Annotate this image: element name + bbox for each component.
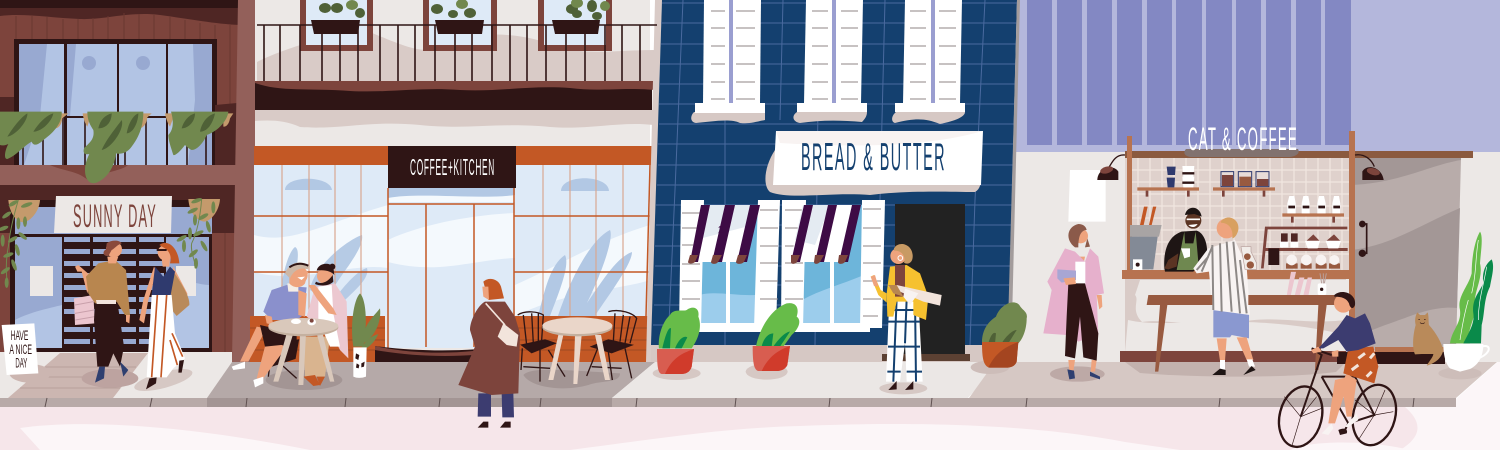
A-frame sign: A NICE xyxy=(9,341,32,357)
hanging pot left with vine xyxy=(0,199,40,288)
seated man with hat xyxy=(232,262,342,390)
woman in pink coat xyxy=(1043,224,1105,382)
milk bottles xyxy=(1287,196,1340,213)
sign: Cat and Coffee xyxy=(1184,121,1299,157)
street xyxy=(0,360,1500,450)
counter items xyxy=(1288,273,1326,295)
woman in striped trousers xyxy=(132,243,194,395)
hanging pot right with vine xyxy=(176,197,220,269)
shelves and cups xyxy=(1130,155,1493,450)
cookie jar xyxy=(1241,247,1257,269)
sign: Coffee + Kitchen xyxy=(388,146,516,188)
building: Bread and Butter xyxy=(651,0,1017,363)
olive potted plant xyxy=(971,302,1027,374)
cafe table two xyxy=(542,317,612,384)
building: Cat and Coffee xyxy=(1007,0,1500,362)
street scene illustration: CAT & COFFEE xyxy=(1188,121,1298,157)
door handle xyxy=(1359,221,1367,257)
cafe interior and right figures, drawn at 3x xyxy=(1130,155,1493,450)
potted plant with spotted pot xyxy=(352,293,380,378)
jars xyxy=(1221,172,1269,187)
chair right xyxy=(587,311,637,380)
awning 2 xyxy=(83,112,152,183)
A-frame sign: HAVE xyxy=(11,327,28,343)
sign: Sunny Day xyxy=(54,196,172,234)
red potted plant xyxy=(653,308,701,380)
woman in yellow jacket xyxy=(871,244,942,394)
awning 3 xyxy=(165,112,233,155)
building: Sunny Day xyxy=(0,0,257,362)
awning 1 xyxy=(0,112,68,159)
door xyxy=(882,204,970,361)
cafe table one xyxy=(268,318,338,385)
wall poster xyxy=(1068,170,1106,222)
lower windows with shutters and awnings xyxy=(679,200,970,361)
wall lamp right xyxy=(1355,155,1384,180)
centre-left figures, drawn at 3x xyxy=(458,279,701,428)
building: Coffee + Kitchen xyxy=(250,0,662,365)
bar table xyxy=(1147,295,1338,372)
street scene illustration: BREAD & BUTTER xyxy=(801,136,946,179)
street scene illustration: COFFEE+KITCHEN xyxy=(410,154,495,180)
A-frame sign: DAY xyxy=(15,355,28,371)
bearded man in pink jacket xyxy=(303,264,348,386)
coffee machine xyxy=(1130,207,1162,270)
A-frame sign xyxy=(2,323,51,383)
cyclist xyxy=(1273,292,1402,450)
tall plant in white cup xyxy=(1438,232,1493,379)
balcony railing and planters xyxy=(257,0,657,81)
lamp left xyxy=(1097,155,1125,180)
table shadow xyxy=(523,370,620,388)
pastry case xyxy=(1261,227,1348,269)
pavement xyxy=(0,347,1497,407)
chair left xyxy=(518,312,565,382)
left storefront details, drawn at 3x xyxy=(0,112,380,395)
customer in striped shirt xyxy=(1193,218,1256,375)
street scene illustration: SUNNY DAY xyxy=(73,198,157,234)
woman in tan sweater xyxy=(74,241,138,388)
barista xyxy=(1164,208,1207,272)
sign: Bread and Butter xyxy=(765,131,983,196)
stray label: 2 xyxy=(718,225,724,236)
woman in brown coat, from behind xyxy=(458,279,520,428)
upper shuttered windows xyxy=(691,0,965,124)
cat xyxy=(1413,312,1443,366)
bicycle xyxy=(1273,348,1402,450)
red potted plant two xyxy=(746,303,799,380)
centre-right figures, drawn at 3x xyxy=(746,155,1125,394)
